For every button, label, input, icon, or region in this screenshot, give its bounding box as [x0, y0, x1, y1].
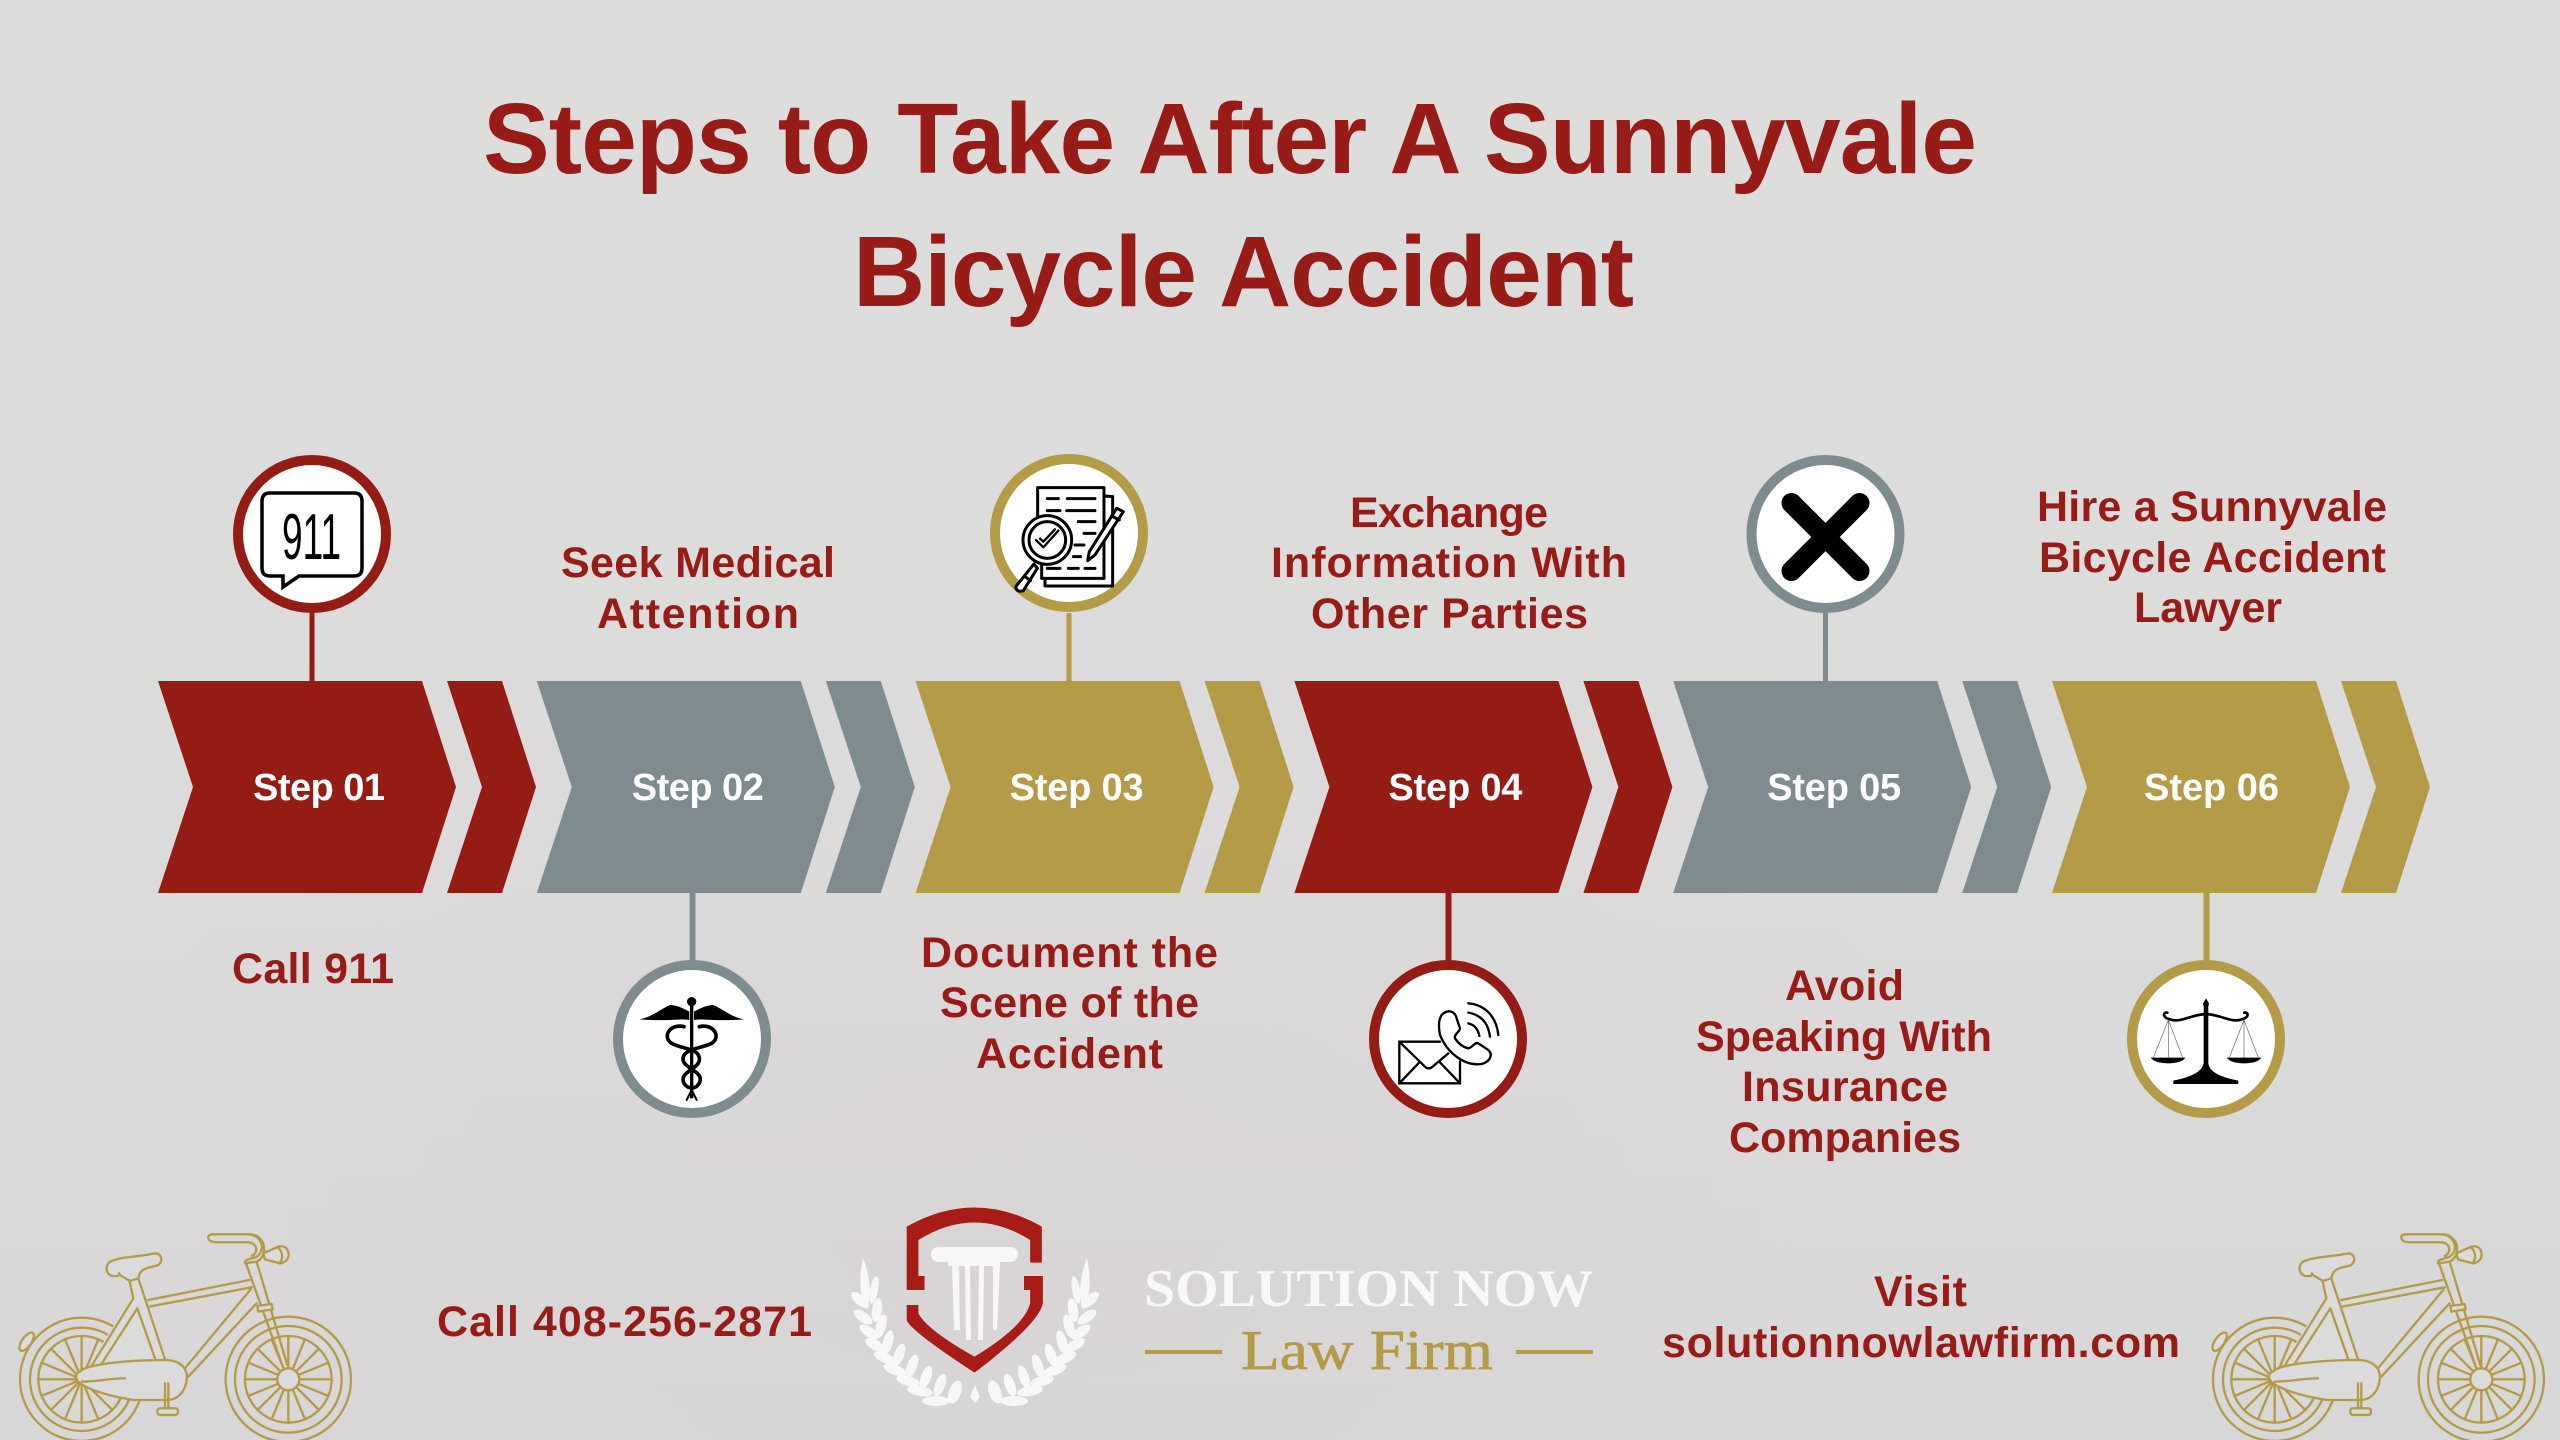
label: hire a lawyer: Hire a Sunnyvale: [2037, 483, 2387, 531]
icon: black cross: [1752, 460, 1900, 681]
step 05 chevron: [1673, 681, 2051, 893]
label: document the scene: Accident: [976, 1030, 1163, 1078]
label: exchange information: Exchange: [1350, 489, 1548, 537]
icon: 911 speech bubble: [238, 460, 386, 681]
label: seek medical attention: Seek Medical: [561, 539, 835, 587]
website call to action: [1662, 1268, 2180, 1367]
step labels: [232, 483, 2387, 1162]
website call to action: Visit: [1874, 1268, 1967, 1316]
label: hire a lawyer: [2037, 483, 2387, 632]
logo shield: [907, 1207, 1043, 1373]
step 02 chevron: [537, 681, 915, 893]
label: document the scene: [921, 929, 1218, 1078]
step 01 chevron: [158, 681, 536, 893]
icon: caduceus: [618, 893, 766, 1113]
icon: right bicycle: [2210, 1234, 2544, 1440]
label: avoid speaking: Insurance: [1742, 1063, 1948, 1111]
step 06 chevron: [2052, 681, 2430, 893]
label: avoid speaking: Companies: [1729, 1114, 1961, 1162]
step 04 chevron: Step 04: [1388, 767, 1522, 809]
logo laurel wreath: [848, 1258, 1102, 1406]
icon: scales of justice: [2132, 893, 2280, 1113]
label: document the scene: Scene of the: [940, 979, 1199, 1027]
timeline of six chevrons: [158, 681, 2430, 893]
label: seek medical attention: Attention: [597, 590, 799, 638]
icon: phone and envelope: [1374, 893, 1522, 1113]
title: [483, 83, 1977, 328]
step 03 chevron: Step 03: [1010, 767, 1144, 809]
title: Bicycle Accident: [853, 216, 1634, 328]
icon: document with magnifier: [995, 459, 1143, 681]
website call to action: solutionnowlawfirm.com: [1662, 1319, 2180, 1367]
step 01 chevron: Step 01: [253, 767, 385, 809]
label: call 911: Call 911: [232, 945, 394, 993]
label: hire a lawyer: Lawyer: [2134, 584, 2282, 632]
logo: Solution Now Law Firm: [848, 1207, 1593, 1406]
label: hire a lawyer: Bicycle Accident: [2039, 534, 2386, 582]
label: exchange information: [1271, 489, 1627, 638]
logo wordmark: Law Firm: [1241, 1320, 1493, 1382]
step 04 chevron: [1294, 681, 1672, 893]
logo wordmark: SOLUTION NOW: [1144, 1260, 1593, 1318]
label: seek medical attention: [561, 539, 835, 638]
label: document the scene: Document the: [921, 929, 1218, 977]
phone call to action: Call 408-256-2871: [437, 1298, 812, 1346]
logo pillar: [931, 1247, 1018, 1340]
label: avoid speaking: Avoid: [1785, 962, 1904, 1010]
step 05 chevron: Step 05: [1767, 767, 1901, 809]
step 06 chevron: Step 06: [2144, 767, 2279, 809]
label: avoid speaking: [1696, 962, 1992, 1162]
icon: 911 speech bubble: 911: [282, 501, 341, 574]
step 03 chevron: [916, 681, 1294, 893]
label: avoid speaking: Speaking With: [1696, 1013, 1992, 1061]
label: exchange information: Information With: [1271, 539, 1627, 587]
label: exchange information: Other Parties: [1311, 590, 1588, 638]
icon: left bicycle: [17, 1234, 351, 1440]
title: Steps to Take After A Sunnyvale: [483, 83, 1977, 195]
logo wordmark: [1144, 1260, 1593, 1382]
step 02 chevron: Step 02: [632, 767, 764, 809]
